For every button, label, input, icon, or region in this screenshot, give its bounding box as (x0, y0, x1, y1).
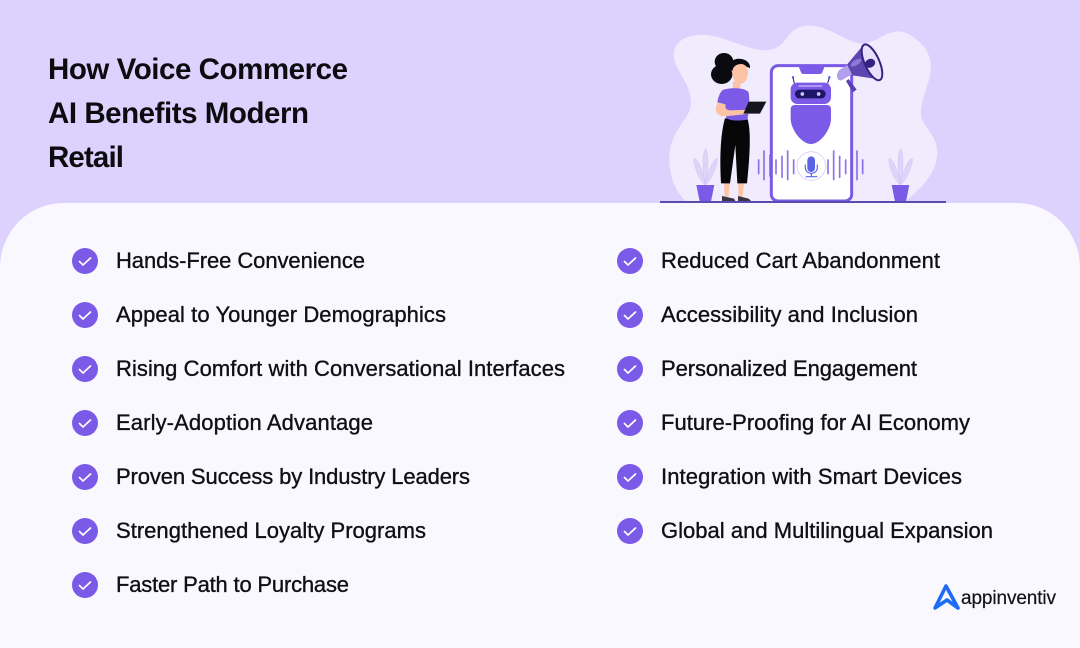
title: AI Benefits Modern (48, 97, 309, 130)
benefits list: right column: Personalized Engagement (661, 356, 917, 381)
benefits list: right column (617, 248, 993, 544)
benefits list: left column: Strengthened Loyalty Programs (116, 518, 426, 543)
illustration: voice assistant phone scene (660, 26, 946, 203)
right plant (889, 148, 912, 201)
benefits list: left column: Early-Adoption Advantage (116, 410, 373, 435)
robot (791, 76, 831, 144)
title (48, 53, 348, 174)
benefits list: left column: Faster Path to Purchase (116, 572, 349, 597)
benefits list: right column: Accessibility and Inclusion (661, 302, 918, 327)
benefits list: left column: Appeal to Younger Demographics (116, 302, 446, 327)
benefits list: left column: Rising Comfort with Conversational Interfaces (116, 356, 565, 381)
background blob (669, 26, 937, 202)
benefits list: right column: Integration with Smart Devices (661, 464, 962, 489)
microphone (797, 152, 826, 180)
benefits list: right column: Global and Multilingual Expansion (661, 518, 993, 543)
benefits list: left column: Hands-Free Convenience (116, 248, 365, 273)
title: How Voice Commerce (48, 53, 348, 86)
benefits list: right column: Reduced Cart Abandonment (661, 248, 940, 273)
benefits list: right column: Future-Proofing for AI Economy (661, 410, 970, 435)
person with tablet (711, 53, 766, 202)
left plant (694, 148, 717, 201)
sound waves (759, 151, 863, 180)
phone (771, 65, 852, 201)
content panel (0, 203, 1080, 648)
benefits list: left column: Proven Success by Industry Leaders (116, 464, 470, 489)
megaphone (837, 42, 887, 92)
ground line (660, 201, 946, 203)
title: Retail (48, 141, 124, 174)
logo: appinventiv: appinventiv (961, 588, 1056, 609)
benefits list: left column (72, 248, 565, 598)
